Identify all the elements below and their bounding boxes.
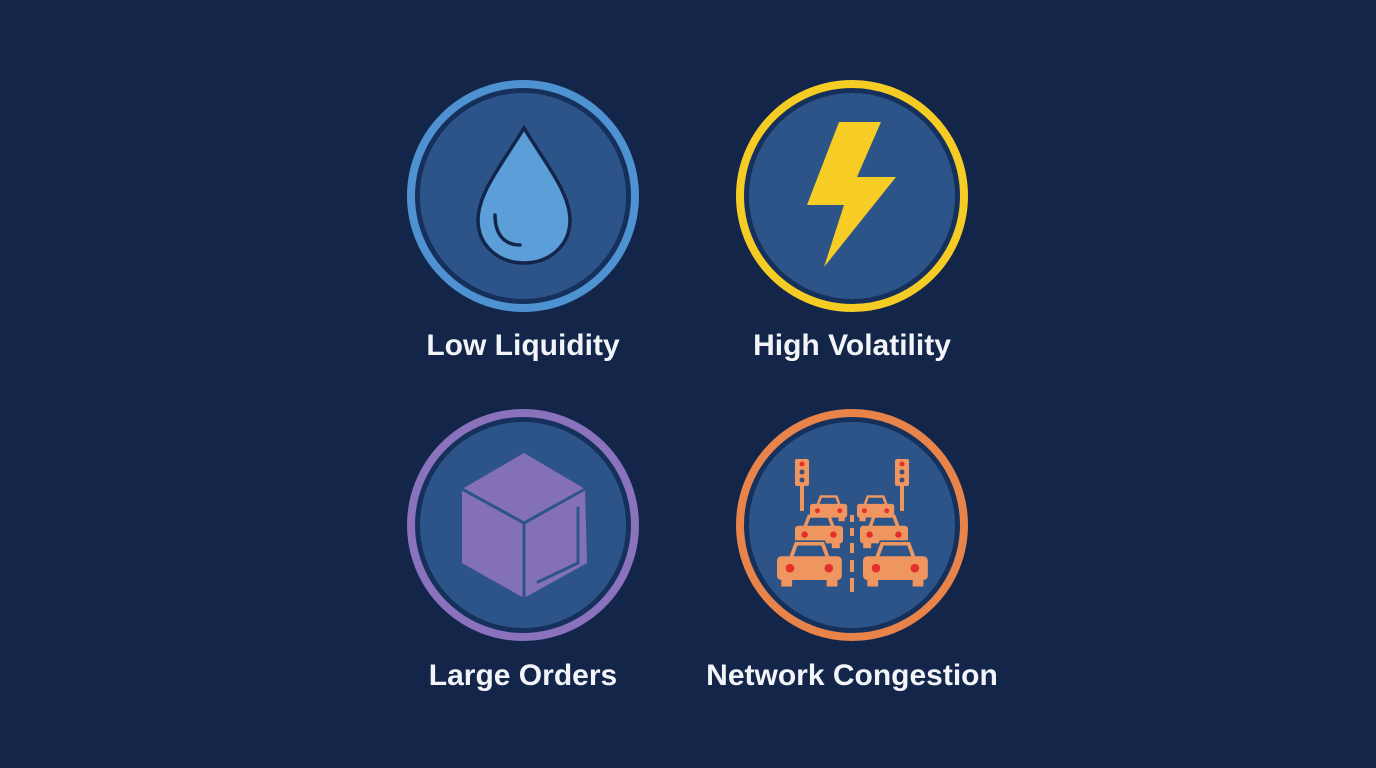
icon circle: blue xyxy=(411,84,635,308)
panel: low liquidity xyxy=(411,84,635,362)
icon circle: yellow xyxy=(740,84,964,308)
label: High Volatility: High Volatility xyxy=(753,329,951,362)
icon circle: purple xyxy=(411,413,635,637)
icon: cube xyxy=(462,453,587,598)
label: Low Liquidity: Low Liquidity xyxy=(426,329,620,362)
icon: traffic jam xyxy=(777,459,928,592)
icon: water drop xyxy=(478,128,570,263)
panel: high volatility xyxy=(740,84,964,362)
icon circle: orange xyxy=(740,413,964,637)
icon: lightning bolt xyxy=(807,122,896,267)
panel: large orders xyxy=(411,413,635,692)
panel: network congestion xyxy=(706,413,998,692)
label: Large Orders: Large Orders xyxy=(429,659,617,692)
label: Network Congestion: Network Congestion xyxy=(706,659,998,692)
